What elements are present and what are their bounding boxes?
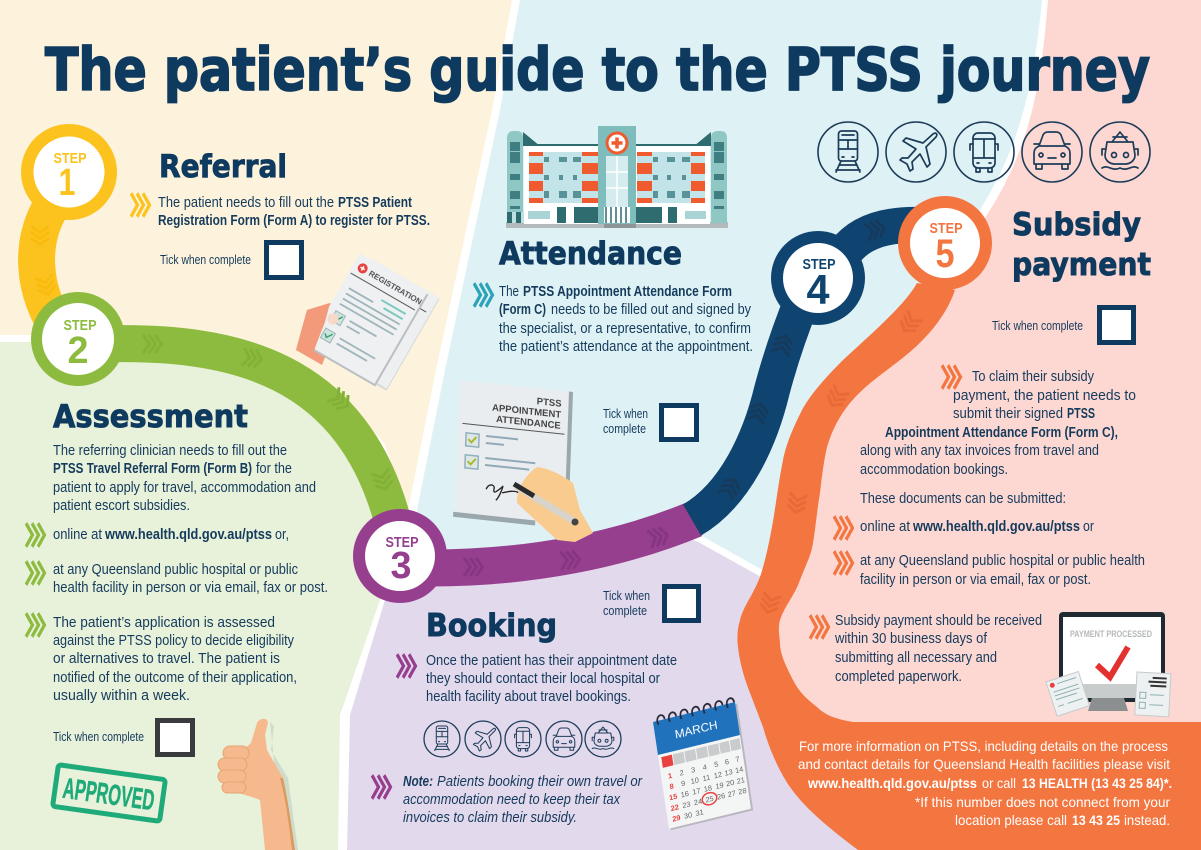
step 3 badge: [353, 509, 447, 603]
text: assessment outcome: usually within a week.: [53, 688, 190, 704]
heading: assessment: Assessment: [53, 399, 248, 435]
text: online option: online at: [53, 527, 102, 543]
icon: purple chevrons: [397, 654, 416, 678]
illustration: calendar: 4: [702, 762, 707, 772]
illustration: calendar: 21: [736, 775, 745, 786]
text: attendance body: the patient’s attendance at the appointment.: [499, 339, 753, 355]
text: footer information: instead.: [1124, 812, 1170, 828]
step 4 badge: [771, 231, 865, 325]
illustration: attendance form being signed: [453, 380, 593, 542]
panel: subsidy content: [810, 207, 1151, 685]
text: assessment outcome: against the PTSS policy to decide eligibility: [53, 633, 295, 649]
heading: booking: Booking: [426, 608, 557, 644]
checkbox: [662, 406, 696, 440]
text: booking body: they should contact their local hospital or: [426, 671, 660, 687]
illustration: calendar: 30: [683, 810, 693, 821]
text: attendance body: The: [499, 284, 519, 300]
text: attendance body: [499, 284, 753, 355]
step 4 badge: STEP: [802, 256, 836, 273]
icon: orange chevrons hospital: [834, 551, 852, 575]
icon: yellow chevrons: [131, 193, 150, 217]
stamp: approved: APPROVED: [61, 773, 157, 817]
step 1 badge: [21, 124, 117, 220]
text: booking body: [426, 653, 677, 705]
text: subsidy claim: [860, 369, 1136, 507]
illustration: calendar: MARCH: [674, 717, 718, 742]
illustration: attendance form being signed: PTSS: [537, 396, 562, 410]
illustration: calendar: 6: [724, 757, 730, 767]
illustration: attendance form being signed: APPOINTMENT: [492, 403, 561, 421]
text: assessment outcome: notified of the outcome of their application,: [53, 670, 297, 686]
text: hospital option: [53, 562, 328, 596]
illustration: calendar: 12: [713, 770, 723, 780]
text: footer information: For more information on PTSS, including details on the process: [799, 738, 1168, 754]
illustration: calendar: 31: [695, 807, 704, 818]
text: payment timing: completed paperwork.: [835, 669, 962, 685]
text: payment timing: within 30 business days of: [834, 631, 988, 647]
illustration: calendar: 23: [682, 799, 691, 810]
illustration: registration forms held in hand: REGISTRATION: [367, 269, 424, 307]
illustration: calendar: 20: [725, 778, 735, 789]
text: note: Patients booking their own travel or: [437, 774, 643, 790]
text: subsidy claim: PTSS: [1067, 406, 1095, 422]
text: payment timing: Subsidy payment should be received: [835, 613, 1042, 629]
tick label: Tick when complete: [53, 730, 144, 744]
illustration: calendar: 13: [724, 767, 733, 778]
icon: green chevrons online: [26, 523, 44, 547]
step 3 badge: STEP: [386, 534, 418, 551]
panel: assessment background: [0, 342, 408, 850]
icon: green chevrons assessment: [26, 613, 44, 637]
panel: referral content: [131, 149, 430, 278]
illustration: calendar: 2: [679, 768, 684, 778]
panel: booking content: [372, 586, 698, 826]
step 1 badge: 1: [58, 162, 76, 204]
illustration: calendar: 11: [702, 773, 711, 783]
illustration: payment processed monitor: [1046, 612, 1171, 717]
illustration: calendar: 8: [669, 781, 674, 791]
illustration: hospital: [506, 126, 728, 228]
text: note: invoices to claim their subsidy.: [403, 810, 577, 826]
text: assessment intro: PTSS Travel Referral Form (Form B): [53, 461, 252, 477]
heading: subsidy payment: payment: [1012, 247, 1151, 283]
text: submit online: www.health.qld.gov.au/ptss: [912, 519, 1080, 535]
illustration: calendar: 26: [716, 791, 726, 802]
tick label: complete: [603, 422, 646, 436]
road: step 1 segment: [31, 205, 62, 335]
text: footer information: *If this number does not connect from your: [915, 794, 1170, 810]
text: footer information: or call: [982, 775, 1016, 791]
checkbox: [1100, 308, 1134, 342]
panel: assessment content: [26, 399, 328, 754]
illustration: calendar: 10: [690, 775, 699, 786]
road: step 4 segment: [692, 219, 920, 520]
text: subsidy claim: submit their signed: [953, 406, 1063, 422]
text: subsidy claim: These documents can be submitted:: [860, 491, 1066, 507]
illustration: calendar: 29: [672, 813, 681, 824]
illustration: calendar: 16: [680, 789, 689, 800]
text: hospital option: health facility in person or via email, fax or post.: [53, 580, 328, 596]
text: assessment intro: [53, 443, 316, 514]
illustration: calendar: 7: [735, 754, 740, 764]
text: hospital option: at any Queensland public hospital or public: [53, 562, 298, 578]
text: payment timing: [834, 613, 1042, 685]
text: note: accommodation need to keep their tax: [403, 792, 621, 808]
panel: attendance background: [417, 0, 1042, 577]
illustration: calendar: 17: [692, 786, 701, 797]
checkbox: [266, 242, 302, 278]
illustration: calendar: [652, 697, 753, 831]
text: assessment intro: The referring clinician needs to fill out the: [53, 443, 287, 459]
tick label: [603, 589, 650, 618]
tick label: Tick when: [603, 407, 648, 421]
heading: subsidy payment: [1012, 207, 1151, 283]
step 5 badge: STEP: [930, 220, 962, 237]
text: submit online: or: [1083, 519, 1094, 535]
illustration: calendar: 1: [667, 771, 673, 781]
step 3 badge: 3: [390, 545, 412, 587]
illustration: calendar: 22: [670, 802, 679, 813]
text: online option: or,: [275, 527, 289, 543]
illustration: payment processed monitor: PAYMENT PROCESSED: [1070, 629, 1152, 639]
text: booking body: Once the patient has their appointment date: [426, 653, 677, 669]
road: step 2 segment: [100, 335, 395, 530]
text: subsidy claim: along with any tax invoices from travel and: [860, 443, 1099, 459]
panel: subsidy background: [760, 0, 1201, 760]
text: online option: www.health.qld.gov.au/ptss: [104, 527, 272, 543]
road: step 3 segment: [430, 519, 695, 576]
checkbox: [158, 720, 192, 754]
text: attendance body: the specialist, or a representative, to confirm: [499, 321, 751, 337]
illustration: thumbs up: [218, 719, 298, 850]
illustration: calendar: 14: [734, 764, 744, 775]
tick label: Tick when complete: [992, 319, 1083, 333]
text: footer information: www.health.qld.gov.au/ptss: [807, 775, 977, 791]
heading: referral: Referral: [159, 149, 287, 185]
step 2 badge: 2: [68, 330, 88, 372]
illustration: calendar: 5: [714, 759, 719, 769]
tick label: Tick when: [603, 589, 650, 603]
text: footer information: and contact details for Queensland Health facilities please visit: [798, 756, 1170, 772]
stamp: approved: [53, 765, 165, 821]
illustration: calendar: 25: [705, 794, 714, 805]
text: footer information: 13 HEALTH (13 43 25 84)*.: [1022, 775, 1172, 791]
icon: purple chevrons note: [372, 775, 390, 799]
text: referral body: [158, 195, 430, 229]
tick label: complete: [603, 604, 647, 618]
tick label: [603, 407, 648, 436]
road: step 5 segment and footer band: [737, 283, 1201, 850]
step 1 badge: STEP: [54, 150, 86, 167]
text: subsidy claim: payment, the patient needs to: [953, 388, 1136, 404]
text: footer information: [798, 738, 1172, 828]
text: attendance body: (Form C): [499, 302, 546, 318]
text: assessment outcome: or alternatives to travel. The patient is: [53, 651, 280, 667]
icons: large transport row: [818, 122, 1150, 182]
heading: subsidy payment: Subsidy: [1012, 207, 1141, 243]
step 4 badge: 4: [806, 266, 830, 313]
step 2 badge: [31, 292, 125, 386]
step 5 badge: [898, 196, 992, 290]
text: note: Note:: [403, 774, 433, 790]
text: assessment intro: for the: [256, 461, 292, 477]
illustration: calendar: 15: [669, 792, 678, 802]
text: submit in person: at any Queensland public hospital or public health: [860, 553, 1145, 569]
text: footer information: 13 43 25: [1072, 812, 1120, 828]
icons: small transport row: [424, 721, 621, 757]
text: note: [403, 774, 643, 826]
text: payment timing: submitting all necessary and: [835, 650, 997, 666]
icon: orange chevrons claim: [942, 365, 960, 389]
tick label: Tick when complete: [160, 253, 251, 267]
text: booking body: health facility about travel bookings.: [426, 689, 631, 705]
text: assessment outcome: The patient’s application is assessed: [53, 615, 275, 631]
text: submit in person: facility in person or via email, fax or post.: [860, 572, 1091, 588]
text: subsidy claim: accommodation bookings.: [860, 462, 1008, 478]
icon: orange chevrons payment: [810, 615, 828, 639]
checkbox: [664, 586, 698, 620]
text: assessment intro: patient to apply for travel, accommodation and: [53, 480, 316, 496]
text: referral body: Registration Form (Form A) to register for PTSS.: [158, 213, 430, 229]
illustration: registration forms held in hand: [296, 253, 440, 391]
step 2 badge: STEP: [64, 317, 96, 334]
text: referral body: PTSS Patient: [338, 195, 412, 211]
text: attendance body: PTSS Appointment Attendance Form: [523, 284, 732, 300]
panel: attendance content: [474, 236, 753, 440]
text: submit online: online at: [860, 519, 910, 535]
illustration: calendar: 9: [681, 779, 686, 788]
heading: attendance: Attendance: [499, 236, 682, 272]
illustration: calendar: 18: [703, 783, 713, 794]
text: submit in person: [860, 553, 1145, 588]
illustration: calendar: 19: [715, 780, 724, 791]
illustration: calendar: 28: [738, 786, 747, 797]
panel: booking background: [347, 537, 860, 850]
text: subsidy claim: Appointment Attendance Form (Form C),: [885, 425, 1118, 441]
text: assessment intro: patient escort subsidies.: [53, 498, 190, 514]
panel: referral background: [0, 0, 512, 510]
icon: orange chevrons online: [834, 516, 852, 540]
illustration: calendar: 3: [691, 765, 696, 775]
text: attendance body: needs to be filled out and signed by: [551, 302, 752, 318]
step 5 badge: 5: [936, 232, 954, 276]
text: referral body: The patient needs to fill out the: [158, 195, 334, 211]
text: subsidy claim: To claim their subsidy: [972, 369, 1095, 385]
icon: blue chevrons: [474, 283, 492, 307]
illustration: calendar: 24: [693, 797, 703, 807]
icon: green chevrons hospital: [26, 561, 44, 585]
illustration: attendance form being signed: ATTENDANCE: [496, 414, 561, 432]
text: assessment outcome: [53, 615, 297, 704]
text: footer information: location please call: [955, 812, 1067, 828]
illustration: calendar: 27: [727, 788, 736, 799]
